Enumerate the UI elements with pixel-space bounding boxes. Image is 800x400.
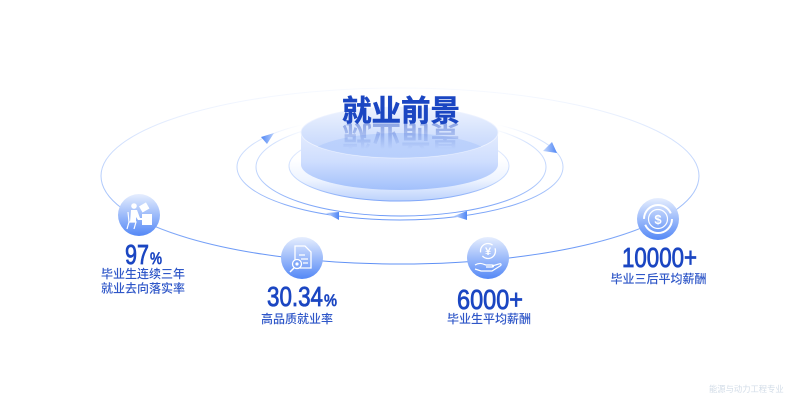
title reflection: 就业前景 — [342, 118, 460, 151]
value: 97%: 97 — [125, 239, 149, 270]
metric: 30.34% high-quality employment — [261, 237, 337, 326]
icon: person at desk — [118, 194, 160, 236]
value: 97%: % — [150, 249, 162, 268]
value: 10000+: 10000+ — [622, 242, 697, 273]
metric: 6000+ average graduate salary — [447, 237, 531, 326]
icon: document with magnifier — [281, 237, 323, 279]
outer orbit ellipse — [101, 88, 699, 264]
label: 97% description: 毕业生连续三年 — [101, 266, 185, 281]
arrow: upper left — [261, 133, 274, 144]
value: 30.34%: 30.34 — [267, 281, 323, 312]
footer: source label: 能源与动力工程专业 — [709, 384, 784, 394]
icon: dollar cycle: $ — [654, 212, 662, 227]
arrow: upper right — [543, 142, 557, 153]
metric: 10000+ salary three years after graduation — [610, 198, 707, 286]
value: 6000+: 6000+ — [457, 284, 523, 315]
label: 97% description — [101, 266, 185, 296]
title: 就业前景 — [342, 95, 460, 128]
value: 30.34%: % — [324, 291, 337, 310]
label: 10000+ description: 毕业三后平均薪酬 — [610, 271, 707, 286]
orbit ring: middle — [237, 114, 563, 220]
podium base disc — [289, 131, 509, 201]
label: 30.34% description: 高品质就业率 — [261, 311, 333, 326]
label: 6000+ description: 毕业生平均薪酬 — [447, 311, 531, 326]
arrow: lower right — [454, 211, 467, 220]
metric: 97% employment retention — [101, 194, 185, 296]
orbit ring: inner — [256, 118, 546, 216]
arrow: lower left — [326, 212, 339, 220]
icon: hand holding yuan coin: ¥ — [485, 246, 492, 258]
label: 97% description: 就业去向落实率 — [101, 280, 185, 296]
cylinder podium — [301, 107, 498, 190]
